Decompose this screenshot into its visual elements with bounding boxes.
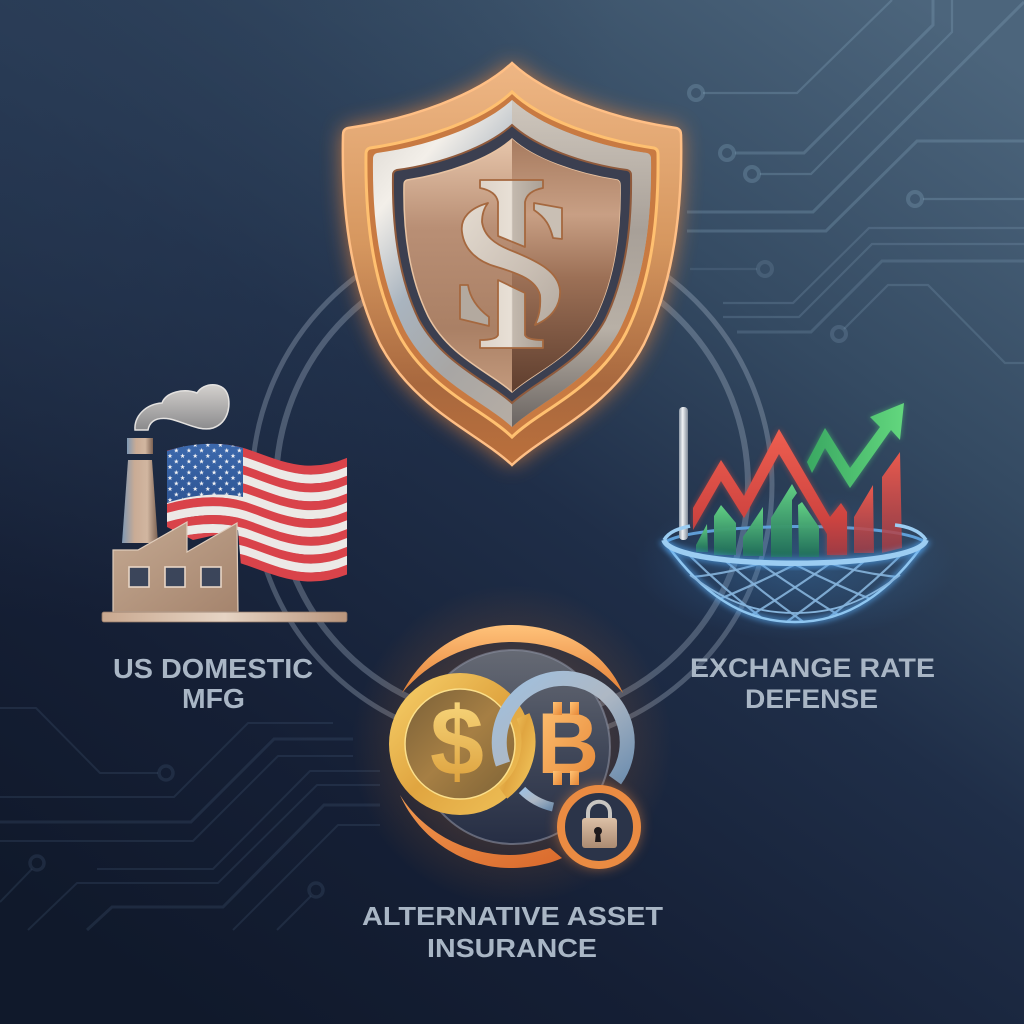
shield metal right half [512, 100, 652, 427]
shield bronze right half [512, 139, 620, 392]
shield bronze face [404, 139, 620, 392]
factory building [113, 522, 238, 612]
label: Alternative Asset Insurance: ALTERNATIVE ASSET [362, 901, 663, 931]
chimney [122, 438, 158, 543]
bitcoin symbol: B [537, 696, 599, 792]
label: US Domestic MFG [113, 653, 313, 714]
net bowl outline [668, 546, 922, 622]
dollar emblem [460, 180, 562, 348]
coin glow [352, 585, 672, 905]
icon: factory with US flag [102, 385, 360, 622]
label: US Domestic MFG: US DOMESTIC [113, 653, 313, 684]
shield dark ring [393, 125, 631, 403]
ground bar [102, 612, 347, 622]
shield outer frame [343, 63, 681, 465]
falling red line and bars [693, 429, 902, 555]
icon: coin pair with lock [352, 585, 672, 905]
label: Alternative Asset Insurance: INSURANCE [427, 933, 597, 963]
pole [679, 407, 688, 540]
circuit traces: bottom left [0, 708, 380, 930]
label: US Domestic MFG: MFG [182, 683, 245, 714]
central disc [416, 650, 610, 844]
flag canton [167, 444, 243, 503]
top orange arc [402, 625, 623, 693]
shield neon line [366, 92, 658, 437]
smoke [135, 385, 229, 430]
label: Exchange Rate Defense [690, 653, 935, 714]
gold dollar coin: $ [430, 687, 484, 796]
icon: shield with dollar emblem [343, 63, 681, 465]
green rising arrow [807, 403, 904, 488]
gold ring overlap [503, 716, 528, 793]
label: Exchange Rate Defense: EXCHANGE RATE [690, 653, 935, 683]
label: Alternative Asset Insurance [362, 901, 663, 963]
lock badge [557, 785, 641, 869]
connecting ring [252, 225, 772, 745]
net glow [635, 490, 955, 640]
net front rim [664, 525, 926, 563]
net back rim [664, 526, 926, 543]
shield metal ring [373, 100, 651, 427]
factory windows [129, 567, 221, 587]
icon: exchange rate chart in safety net [656, 402, 934, 630]
label: Exchange Rate Defense: DEFENSE [745, 684, 878, 714]
US flag [160, 448, 360, 577]
gold dollar coin [389, 673, 531, 815]
bitcoin ring segments [499, 678, 627, 807]
bottom orange arc [400, 795, 562, 868]
shield glow [343, 63, 681, 465]
green bars [696, 484, 819, 557]
net mesh [689, 556, 901, 621]
circuit traces: top right [687, 0, 1024, 363]
